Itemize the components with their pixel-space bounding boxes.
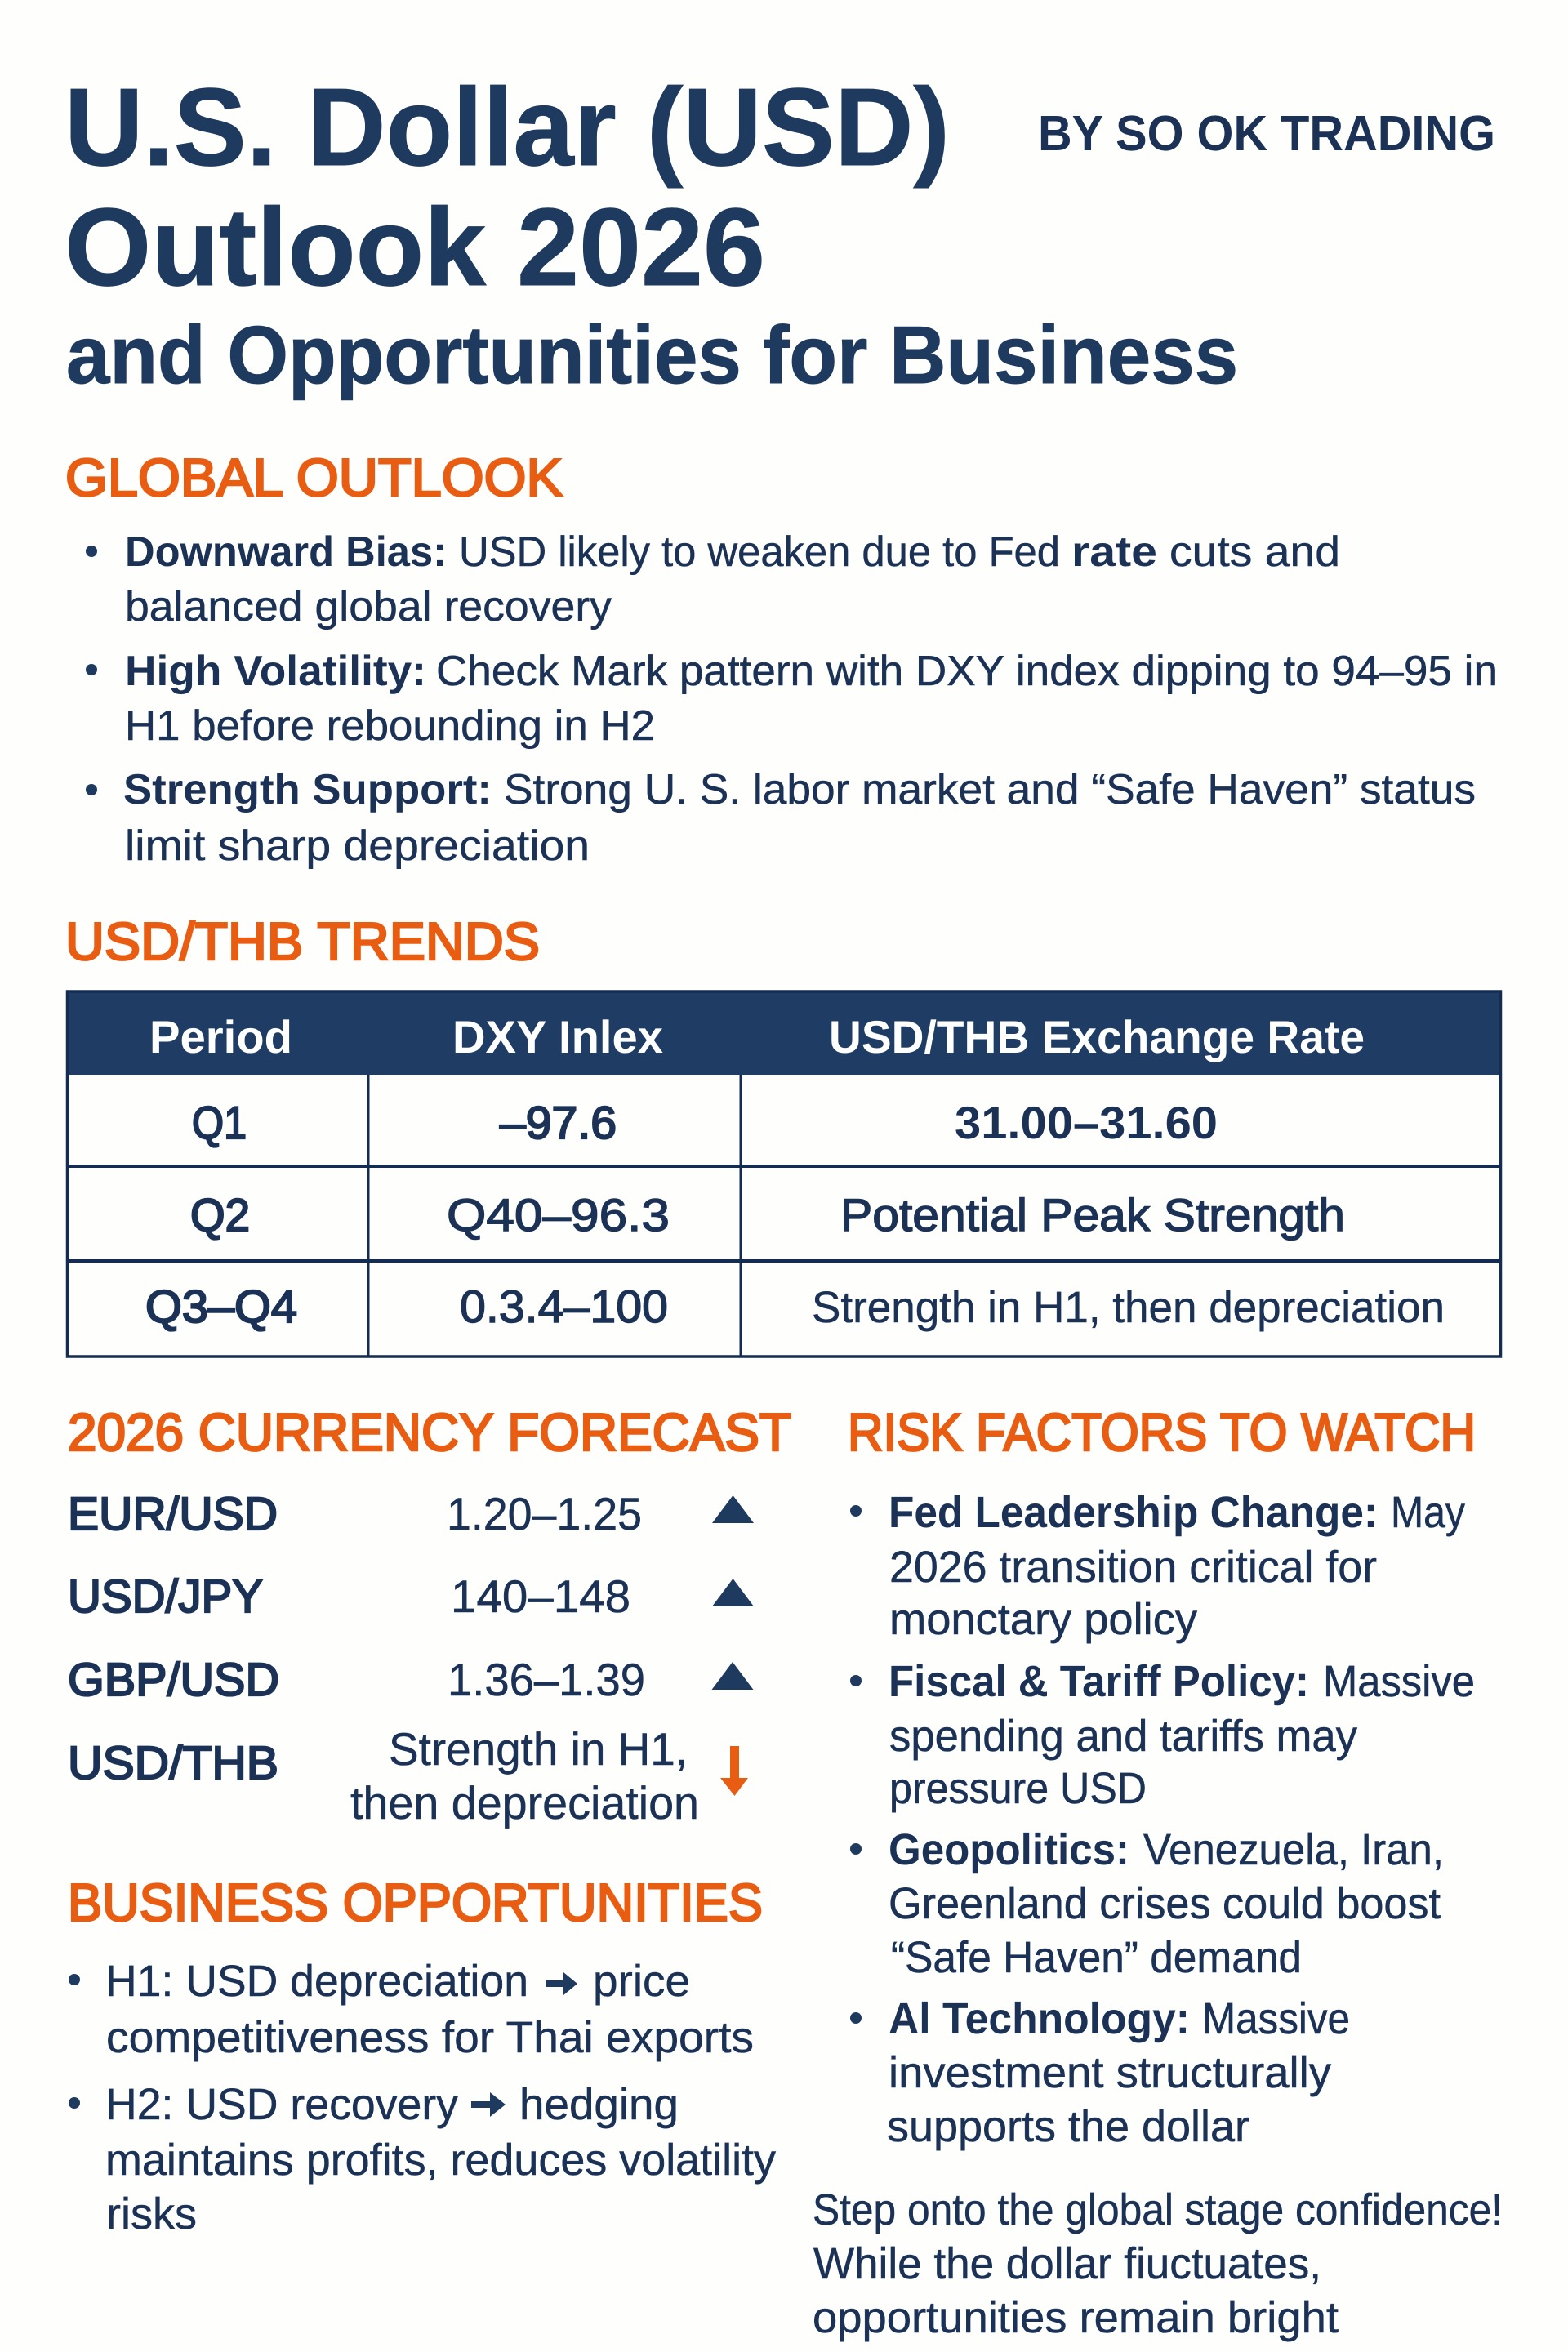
bullet: ai technology: Massive [1202, 1994, 1350, 2043]
table row: Q1: Q1 [192, 1097, 247, 1148]
byline: BY SO OK TRADING [1038, 105, 1495, 161]
panel: global outlook [65, 448, 1498, 870]
bullet: downward bias: rate [1071, 528, 1157, 576]
bullet: downward bias [86, 528, 1340, 630]
heading: business opportunities: BUSINESS OPPORTUNITIES [68, 1873, 763, 1932]
table row: Q1 [192, 1097, 1218, 1148]
heading: usd/thb trends: USD/THB TRENDS [65, 911, 540, 971]
closing message: While the dollar fiuctuates, [813, 2239, 1321, 2288]
bullet: ai technology: Al Technology: [889, 1994, 1190, 2043]
table row: Q2: Potential Peak Strength [840, 1189, 1345, 1241]
forecast row: GBP/USD: 1.36–1.39 [448, 1654, 645, 1705]
bullet: geopolitics: Venezuela, Iran, [1143, 1825, 1444, 1874]
heading: risk factors: RISK FACTORS TO WATCH [848, 1402, 1476, 1462]
panel: 2026 currency forecast [68, 1402, 791, 1829]
bullet: downward bias: USD likely to weaken due to Fed [459, 528, 1060, 576]
bullet: fiscal and tariff policy: pressure USD [889, 1764, 1147, 1813]
table row: Q3–Q4: Q3–Q4 [145, 1281, 297, 1332]
bullet: ai technology: supports the dollar [887, 2102, 1250, 2151]
bullet: strength support: limit sharp depreciation [125, 822, 590, 870]
forecast row: EUR/USD: EUR/USD [68, 1488, 278, 1540]
title: and Opportunities for Business [66, 310, 1238, 401]
bullet: geopolitics: Geopolitics: [889, 1825, 1129, 1874]
table header row: Period [149, 1011, 292, 1062]
bullet: strength support: Strength Support: [123, 766, 492, 813]
bullet: H1: competitiveness for Thai exports [106, 2013, 754, 2062]
bullet: downward bias: cuts and [1169, 528, 1340, 576]
panel: business opportunities [68, 1873, 776, 2238]
table row: Q3–Q4: 0.3.4–100 [460, 1281, 668, 1332]
closing message [813, 2185, 1503, 2342]
table row: Q3–Q4: Strength in H1, then depreciation [812, 1283, 1445, 1332]
closing message: opportunities remain bright [813, 2293, 1339, 2342]
bullet: H2: maintains profits, reduces volatility [105, 2136, 776, 2185]
bullet: H2: hedging [519, 2080, 679, 2129]
table row: Q1: 31.00–31.60 [955, 1097, 1218, 1148]
bullet: downward bias: Downward Bias: [125, 528, 447, 576]
bullet: H2: risks [106, 2189, 197, 2238]
bullet: fiscal and tariff policy: spending and tariffs may [889, 1712, 1357, 1761]
forecast row: USD/JPY: USD/JPY [68, 1570, 263, 1623]
bullet: fiscal and tariff policy: Fiscal & Tariff Policy: [889, 1657, 1309, 1706]
bullet: geopolitics [850, 1825, 1444, 1982]
bullet: high volatility [86, 648, 1498, 750]
table header row [149, 1011, 1365, 1062]
forecast row: USD/THB: then depreciation [350, 1777, 699, 1829]
bullet: geopolitics: Greenland crises could boost [889, 1879, 1441, 1928]
icon: down arrow [720, 1746, 748, 1796]
bullet: high volatility: High Volatility: [125, 648, 426, 695]
bullet: H1: price [593, 1957, 690, 2006]
heading: global outlook: GLOBAL OUTLOOK [65, 448, 563, 507]
forecast row: GBP/USD: GBP/USD [68, 1654, 279, 1706]
table row: Q2: Q40–96.3 [447, 1189, 670, 1241]
bullet: H2: H2: USD recovery [105, 2080, 458, 2129]
bullet: H1: H1: USD depreciation [105, 1957, 528, 2006]
title: U.S. Dollar (USD) [65, 65, 950, 189]
bullet: high volatility: Check Mark pattern with DXY index dipping to 94–95 in [436, 648, 1498, 695]
bullet: H2 [69, 2080, 776, 2238]
bullet: fed leadership change: Fed Leadership Change: [889, 1488, 1378, 1537]
bullet: ai technology [850, 1994, 1350, 2151]
table row: Q2 [190, 1189, 1345, 1241]
bullet: ai technology: investment structurally [889, 2048, 1331, 2097]
forecast row: USD/THB: Strength in H1, [389, 1723, 688, 1775]
title: Outlook 2026 [65, 185, 765, 309]
heading: currency forecast: 2026 CURRENCY FORECAST [68, 1402, 791, 1462]
bullet: fed leadership change: 2026 transition critical for [889, 1543, 1377, 1592]
table header row: DXY Inlex [452, 1011, 663, 1062]
forecast row: USD/JPY [68, 1570, 754, 1623]
table: usd/thb trends [67, 991, 1501, 1356]
bullet: fed leadership change: May [1391, 1488, 1465, 1537]
forecast row: GBP/USD [68, 1654, 753, 1706]
bullet: H1 [69, 1957, 754, 2062]
bullet: geopolitics: “Safe Haven” demand [891, 1933, 1302, 1982]
bullet: fed leadership change [850, 1488, 1465, 1644]
table row: Q2: Q2 [190, 1189, 250, 1241]
forecast row: USD/JPY: 140–148 [451, 1570, 630, 1622]
forecast row: EUR/USD [68, 1488, 754, 1540]
bullet: strength support: Strong U. S. labor market and “Safe Haven” status [504, 766, 1476, 813]
bullet: downward bias: balanced global recovery [125, 583, 612, 630]
table row: Q3–Q4 [145, 1281, 1445, 1332]
closing message: Step onto the global stage confidence! [813, 2185, 1503, 2234]
bullet: strength support [86, 766, 1476, 870]
bullet: fiscal and tariff policy: Massive [1323, 1657, 1475, 1706]
title [65, 65, 1238, 401]
panel: risk factors to watch [848, 1402, 1476, 2151]
forecast row: USD/THB [68, 1723, 748, 1829]
table header row: USD/THB Exchange Rate [829, 1011, 1365, 1062]
bullet: fiscal and tariff policy [850, 1657, 1475, 1813]
bullet: fed leadership change: monctary policy [889, 1595, 1197, 1644]
forecast row: USD/THB: USD/THB [68, 1737, 278, 1789]
bullet: high volatility: H1 before rebounding in H2 [125, 702, 655, 750]
table row: Q1: –97.6 [500, 1097, 617, 1148]
forecast row: EUR/USD: 1.20–1.25 [447, 1488, 642, 1539]
